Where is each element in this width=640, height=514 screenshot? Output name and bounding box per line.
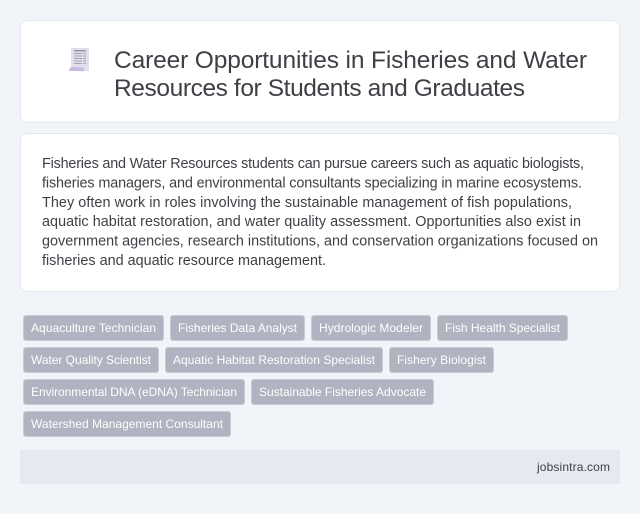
tag: Aquaculture Technician: Aquaculture Technician <box>31 321 156 335</box>
text block: description: They often work in roles involving the sustainable management of fish populations, <box>42 195 572 211</box>
panel: description <box>20 134 620 292</box>
tag: Fish Health Specialist <box>438 316 568 340</box>
tag: Aquatic Habitat Restoration Specialist <box>166 348 382 372</box>
text block: description: government agencies, research institutions, and conservation organizations focused on <box>42 234 598 250</box>
tag: Fisheries Data Analyst <box>170 316 304 340</box>
footer text: jobsintra.com <box>536 460 610 474</box>
heading: Career Opportunities in Fisheries and Water <box>114 47 587 74</box>
tag: Fish Health Specialist: Fish Health Specialist <box>445 321 561 335</box>
tag: Environmental DNA (eDNA) Technician: Environmental DNA (eDNA) Technician <box>31 385 237 399</box>
tag: Water Quality Scientist <box>24 348 158 372</box>
text block: description: fisheries managers, and environmental consultants specializing in marine ecosystems. <box>42 175 582 191</box>
heading <box>114 47 587 102</box>
tag: Watershed Management Consultant <box>24 412 230 436</box>
tag: Aquatic Habitat Restoration Specialist: Aquatic Habitat Restoration Specialist <box>173 353 376 367</box>
text block: description: Fisheries and Water Resources students can pursue careers such as aquatic biologists, <box>42 156 584 172</box>
heading: Resources for Students and Graduates <box>114 75 525 102</box>
text block: description: fisheries and aquatic resource management. <box>42 253 326 269</box>
tag: Fishery Biologist <box>390 348 494 372</box>
tag: Fisheries Data Analyst: Fisheries Data Analyst <box>178 321 298 335</box>
tag: Environmental DNA (eDNA) Technician <box>24 380 244 404</box>
footer <box>20 450 620 484</box>
tag: Hydrologic Modeler: Hydrologic Modeler <box>319 321 423 335</box>
text block: description: aquatic habitat restoration, and water quality assessment. Opportunities also exist in <box>42 214 581 230</box>
tag: Sustainable Fisheries Advocate: Sustainable Fisheries Advocate <box>259 385 426 399</box>
tag: Hydrologic Modeler <box>312 316 430 340</box>
tag: Aquaculture Technician <box>24 316 164 340</box>
icon: document scroll <box>69 48 89 71</box>
panel: title card <box>20 20 620 122</box>
tag: Sustainable Fisheries Advocate <box>252 380 434 404</box>
tag: Fishery Biologist: Fishery Biologist <box>397 353 487 367</box>
text block: description <box>42 156 598 269</box>
career tags <box>24 316 568 436</box>
tag: Water Quality Scientist: Water Quality Scientist <box>31 353 152 367</box>
tag: Watershed Management Consultant: Watershed Management Consultant <box>31 417 224 431</box>
